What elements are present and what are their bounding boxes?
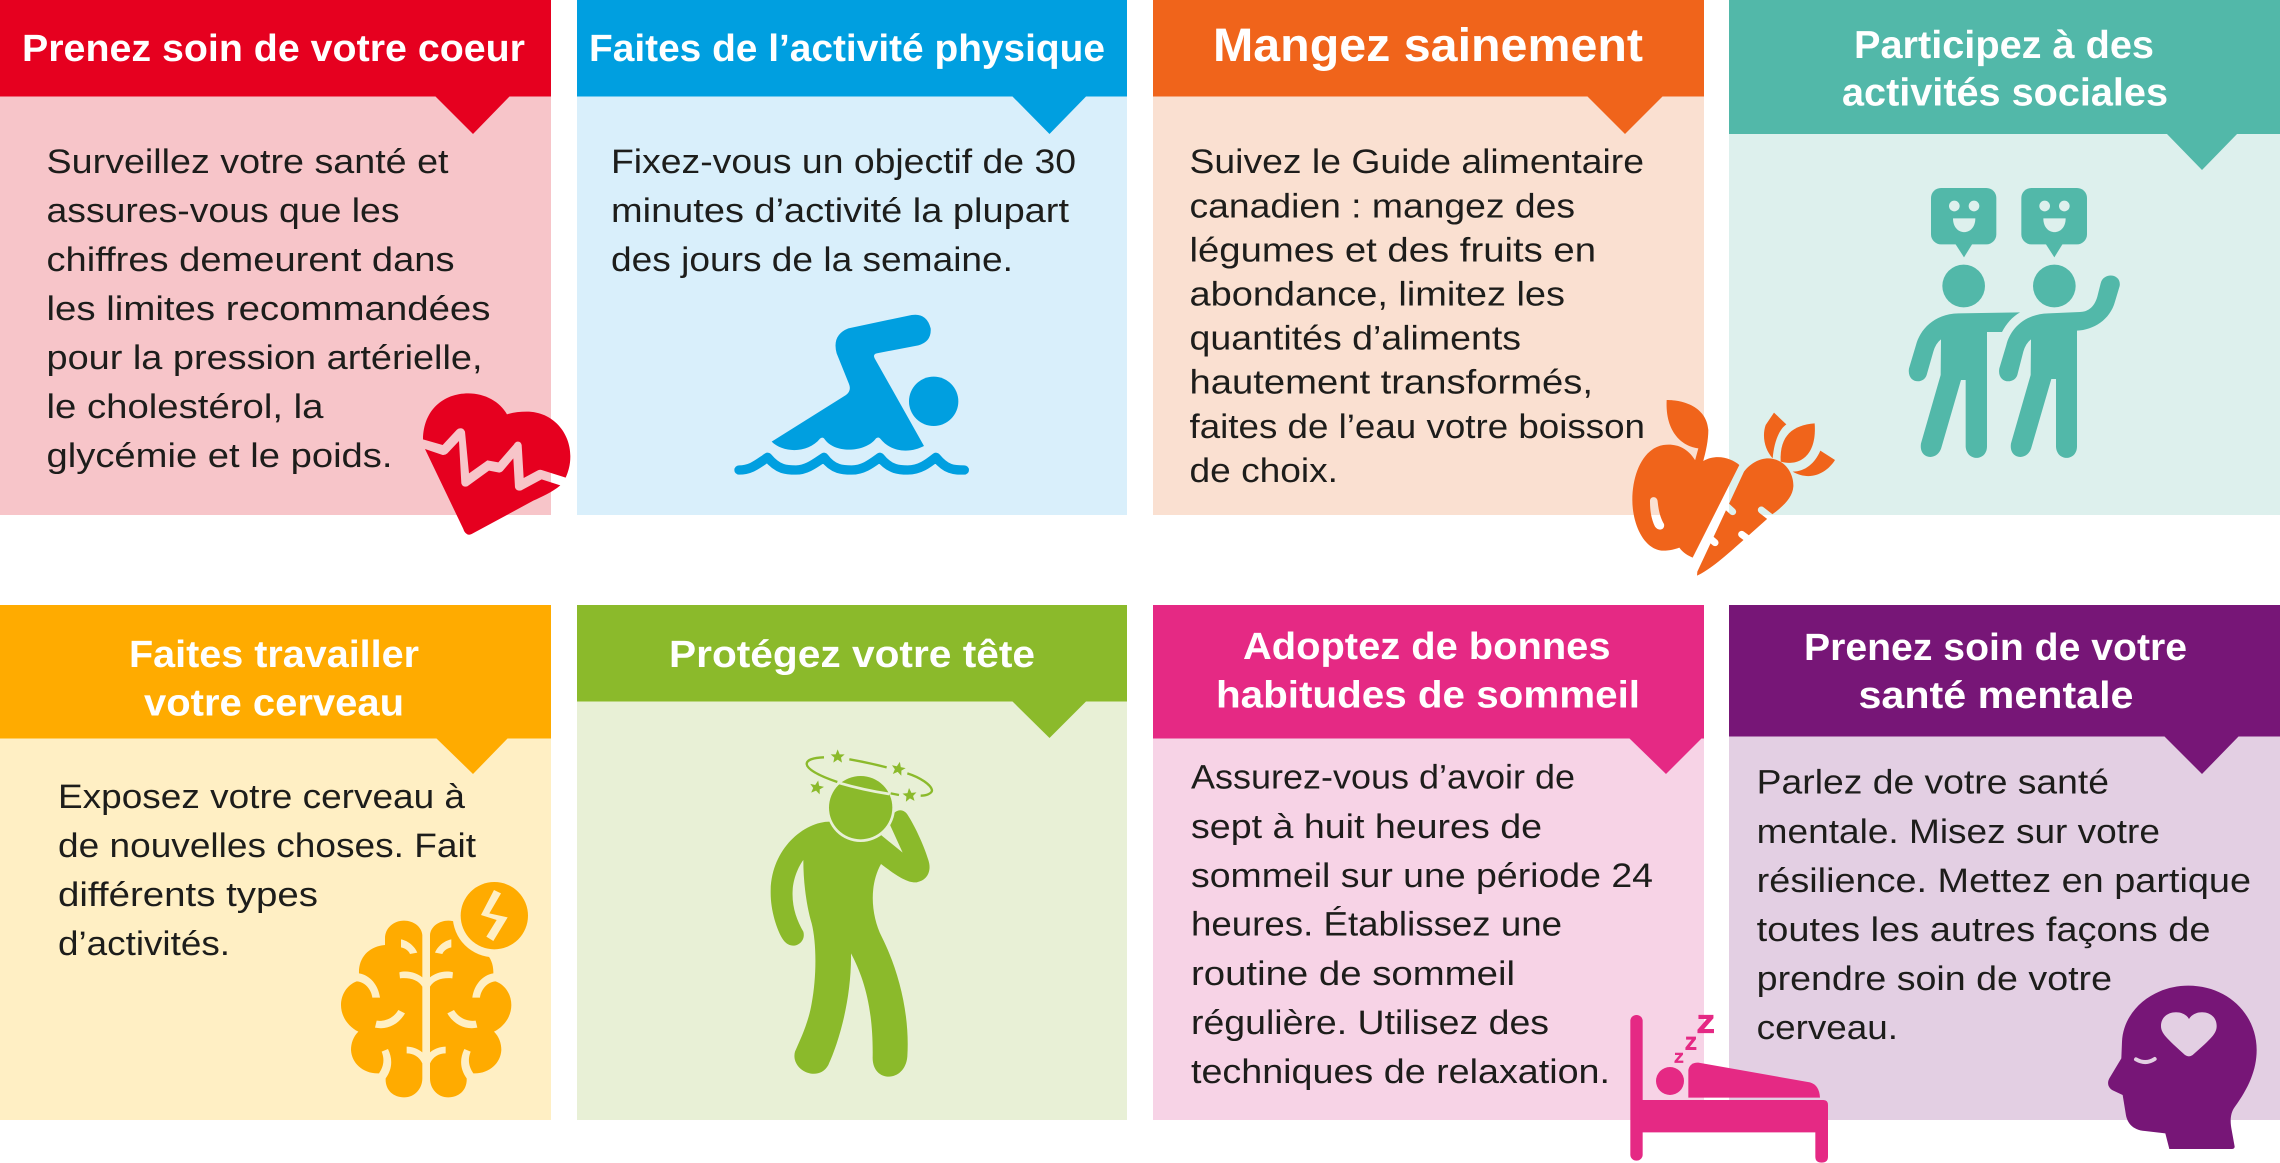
- text block: travailler le cerveau: de nouvelles choses. Fait: [58, 827, 477, 865]
- heading: santé mentale: Prenez soin de votre: [1804, 627, 2187, 669]
- icon: heart with pulse: [423, 393, 570, 535]
- text block: activité physique: [611, 143, 1076, 279]
- text block: mangez sainement: [1190, 143, 1645, 490]
- text block: travailler le cerveau: d’activités.: [58, 925, 230, 963]
- panel: protégez votre tête: [577, 605, 1127, 1120]
- panel: activité physique: [577, 0, 1127, 515]
- text block: mangez sainement: de choix.: [1190, 452, 1338, 490]
- text block: sommeil: Assurez-vous d’avoir de: [1191, 759, 1575, 797]
- text block: mangez sainement: faites de l’eau votre boisson: [1190, 408, 1645, 446]
- text block: mangez sainement: hautement transformés,: [1190, 364, 1593, 402]
- icon: person sleeping in bed: [1630, 1010, 1828, 1163]
- icon: brain with lightning: [341, 874, 536, 1097]
- text block: sommeil: sommeil sur une période 24: [1191, 857, 1653, 895]
- text block: sommeil: techniques de relaxation.: [1191, 1053, 1610, 1091]
- text block: santé mentale: prendre soin de votre: [1757, 960, 2112, 998]
- text block: santé mentale: mentale. Misez sur votre: [1757, 813, 2160, 851]
- text block: santé mentale: [1757, 763, 2251, 1047]
- heading: travailler le cerveau: [129, 634, 419, 725]
- heading: travailler le cerveau: votre cerveau: [144, 683, 404, 725]
- icon: apple and carrot: [1632, 400, 1835, 576]
- heading: sommeil: habitudes de sommeil: [1216, 674, 1640, 716]
- text block: mangez sainement: quantités d’aliments: [1190, 320, 1521, 358]
- text block: sommeil: heures. Établissez une: [1191, 906, 1562, 944]
- icon: swimmer: [739, 315, 964, 470]
- icon: person sleeping in bed: Z: [1674, 1050, 1683, 1065]
- icon: person sleeping in bed: Z: [1685, 1033, 1696, 1053]
- text block: coeur: les limites recommandées: [46, 290, 490, 328]
- heading: activités sociales: Participez à des: [1854, 24, 2154, 67]
- text block: travailler le cerveau: [58, 778, 477, 963]
- text block: activité physique: des jours de la semaine.: [611, 241, 1013, 279]
- text block: santé mentale: Parlez de votre santé: [1757, 763, 2109, 801]
- heading: sommeil: Adoptez de bonnes: [1243, 626, 1610, 668]
- heading: protégez votre tête: Protégez votre tête: [669, 634, 1035, 676]
- heading: santé mentale: [1804, 627, 2187, 717]
- text block: mangez sainement: Suivez le Guide alimentaire: [1190, 143, 1644, 181]
- icon: dizzy person: [771, 749, 932, 1077]
- text block: sommeil: régulière. Utilisez des: [1191, 1004, 1549, 1042]
- text block: sommeil: [1191, 759, 1653, 1091]
- text block: activité physique: Fixez-vous un objectif de 30: [611, 143, 1076, 181]
- heading: travailler le cerveau: Faites travailler: [129, 634, 419, 676]
- panel: coeur: [0, 0, 570, 535]
- text block: coeur: pour la pression artérielle,: [46, 339, 482, 377]
- text block: activité physique: minutes d’activité la plupart: [611, 192, 1070, 230]
- text block: mangez sainement: abondance, limitez les: [1190, 276, 1565, 314]
- text block: coeur: glycémie et le poids.: [46, 437, 392, 475]
- text block: travailler le cerveau: Exposez votre cerveau à: [58, 778, 465, 816]
- panel: santé mentale: [1729, 605, 2280, 1149]
- text block: coeur: chiffres demeurent dans: [46, 241, 454, 279]
- heading: santé mentale: santé mentale: [1858, 675, 2134, 717]
- text block: coeur: le cholestérol, la: [46, 388, 324, 426]
- text block: coeur: Surveillez votre santé et: [46, 143, 449, 181]
- heading: sommeil: [1216, 626, 1640, 716]
- heading: coeur: Prenez soin de votre coeur: [22, 28, 525, 70]
- text block: coeur: assures-vous que les: [46, 192, 400, 230]
- text block: santé mentale: cerveau.: [1757, 1009, 1898, 1047]
- panel: mangez sainement: [1153, 0, 1835, 576]
- icon: person sleeping in bed: Z: [1697, 1010, 1714, 1038]
- text block: travailler le cerveau: différents types: [58, 876, 318, 914]
- heading: activités sociales: [1842, 24, 2168, 114]
- heading: mangez sainement: Mangez sainement: [1213, 18, 1643, 71]
- icon: head with heart: [2108, 986, 2257, 1149]
- heading: activité physique: Faites de l’activité physique: [589, 28, 1105, 70]
- panel: activités sociales: [1729, 0, 2280, 515]
- text block: santé mentale: toutes les autres façons de: [1757, 911, 2210, 949]
- panel: sommeil: [1153, 605, 1828, 1163]
- text block: sommeil: routine de sommeil: [1191, 955, 1515, 993]
- text block: mangez sainement: canadien : mangez des: [1190, 187, 1575, 225]
- panel: travailler le cerveau: [0, 605, 551, 1120]
- text block: mangez sainement: légumes et des fruits en: [1190, 232, 1596, 270]
- text block: coeur: [46, 143, 490, 475]
- heading: activités sociales: activités sociales: [1842, 72, 2168, 114]
- icon: two people talking: [1909, 188, 2120, 458]
- text block: santé mentale: résilience. Mettez en partique: [1757, 862, 2251, 900]
- text block: sommeil: sept à huit heures de: [1191, 808, 1542, 846]
